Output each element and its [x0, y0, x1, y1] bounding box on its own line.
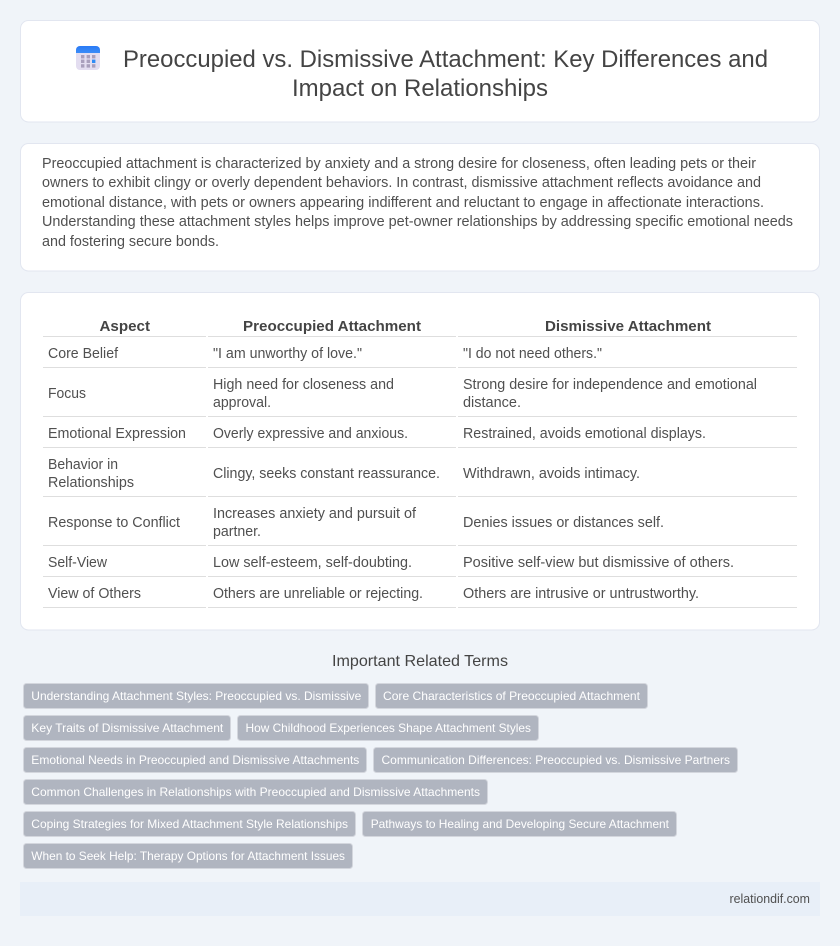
- table row: view of others: Others are unreliable or rejecting.: [213, 586, 423, 602]
- panel: important related terms: [24, 653, 738, 868]
- table row: focus: Focus: [48, 386, 86, 402]
- table row: focus: High need for closeness and: [213, 377, 394, 393]
- tag: common challenges: [24, 780, 488, 804]
- tag: childhood experiences: How Childhood Experiences Shape Attachment Styles: [246, 721, 531, 735]
- table row: focus: [48, 377, 757, 411]
- table header row: [100, 318, 711, 335]
- tag: emotional needs: Emotional Needs in Preoccupied and Dismissive Attachments: [31, 753, 359, 767]
- tag: pathways to healing: Pathways to Healing and Developing Secure Attachment: [371, 817, 670, 831]
- footer: relationdif.com: [730, 891, 810, 906]
- tag: core characteristics: [376, 684, 648, 708]
- table row: behavior in relationships: Behavior in: [48, 457, 118, 473]
- table row: view of others: Others are intrusive or untrustworthy.: [463, 586, 699, 602]
- table row: emotional expression: [48, 426, 706, 442]
- text block: introduction paragraph: and fostering secure bonds.: [42, 234, 219, 250]
- table row: emotional expression: Emotional Expression: [48, 426, 186, 442]
- tag: pathways to healing: [362, 812, 676, 836]
- table row: response to conflict: partner.: [213, 524, 261, 540]
- heading: important related terms: Important Related Terms: [332, 653, 508, 670]
- table row: behavior in relationships: Relationships: [48, 475, 134, 491]
- tag: key traits: Key Traits of Dismissive Attachment: [31, 721, 224, 735]
- tag: understanding attachment styles: [24, 684, 368, 708]
- tag: coping strategies: [24, 812, 356, 836]
- table header row: Preoccupied Attachment: [243, 318, 421, 335]
- table row: core belief: [48, 346, 602, 362]
- title: [123, 46, 768, 102]
- table row: response to conflict: [48, 506, 664, 540]
- table row: self-view: [48, 555, 734, 571]
- table row: focus: approval.: [213, 395, 271, 411]
- table row: focus: Strong desire for independence and emotional: [463, 377, 757, 393]
- title: Impact on Relationships: [292, 75, 548, 102]
- tag: childhood experiences: [238, 716, 538, 740]
- footer: [20, 882, 820, 916]
- tag: understanding attachment styles: Understanding Attachment Styles: Preoccupied vs. Dismissive: [31, 689, 362, 703]
- table row: response to conflict: Denies issues or distances self.: [463, 515, 664, 531]
- table row: view of others: View of Others: [48, 586, 141, 602]
- tag: core characteristics: Core Characteristics of Preoccupied Attachment: [383, 689, 641, 703]
- table row: behavior in relationships: [48, 457, 640, 491]
- table row: behavior in relationships: Withdrawn, avoids intimacy.: [463, 466, 640, 482]
- panel: comparison table: [20, 292, 820, 630]
- table row: core belief: "I do not need others.": [463, 346, 602, 362]
- table row: self-view: Low self-esteem, self-doubting.: [213, 555, 412, 571]
- table row: emotional expression: Overly expressive and anxious.: [213, 426, 408, 442]
- text block: introduction paragraph: emotional distance, with pets or owners appearing indifferent and reluctant to engage in affectionate interactions.: [42, 195, 764, 211]
- table row: self-view: Positive self-view but dismissive of others.: [463, 555, 734, 571]
- text block: introduction paragraph: [42, 156, 793, 250]
- table row: core belief: Core Belief: [48, 346, 119, 362]
- table row: response to conflict: Increases anxiety and pursuit of: [213, 506, 417, 522]
- tag: when to seek help: When to Seek Help: Therapy Options for Attachment Issues: [31, 849, 345, 863]
- table row: core belief: "I am unworthy of love.": [213, 346, 362, 362]
- table header row: Aspect: [100, 318, 150, 335]
- tag: communication differences: [374, 748, 738, 772]
- table row: behavior in relationships: Clingy, seeks constant reassurance.: [213, 466, 440, 482]
- tag: when to seek help: [24, 844, 352, 868]
- table row: focus: distance.: [463, 395, 521, 411]
- tag: coping strategies: Coping Strategies for Mixed Attachment Style Relationships: [31, 817, 348, 831]
- text block: introduction paragraph: Preoccupied attachment is characterized by anxiety and a strong desire for closeness, often leading pets or their: [42, 156, 756, 172]
- tag: emotional needs: [24, 748, 366, 772]
- table header row: Dismissive Attachment: [545, 318, 711, 335]
- table row: response to conflict: Response to Conflict: [48, 515, 180, 531]
- text block: introduction paragraph: owners to exhibit clingy or overly dependent behaviors. In contrast, dismissive attachment reflects avoidance and: [42, 175, 761, 191]
- icon: calendar: [76, 46, 100, 70]
- table row: self-view: Self-View: [48, 555, 108, 571]
- tag: communication differences: Communication Differences: Preoccupied vs. Dismissive Partners: [382, 753, 730, 767]
- panel: header: [20, 20, 820, 122]
- table row: emotional expression: Restrained, avoids emotional displays.: [463, 426, 706, 442]
- tag: common challenges: Common Challenges in Relationships with Preoccupied and Dismissive Attachments: [31, 785, 480, 799]
- tag: key traits: [24, 716, 230, 740]
- panel: introduction: [20, 144, 820, 271]
- title: Preoccupied vs. Dismissive Attachment: Key Differences and: [123, 46, 768, 73]
- table row: view of others: [48, 586, 699, 602]
- text block: introduction paragraph: Understanding these attachment styles helps improve pet-owner relationships by addressing specific emotional needs: [42, 214, 793, 230]
